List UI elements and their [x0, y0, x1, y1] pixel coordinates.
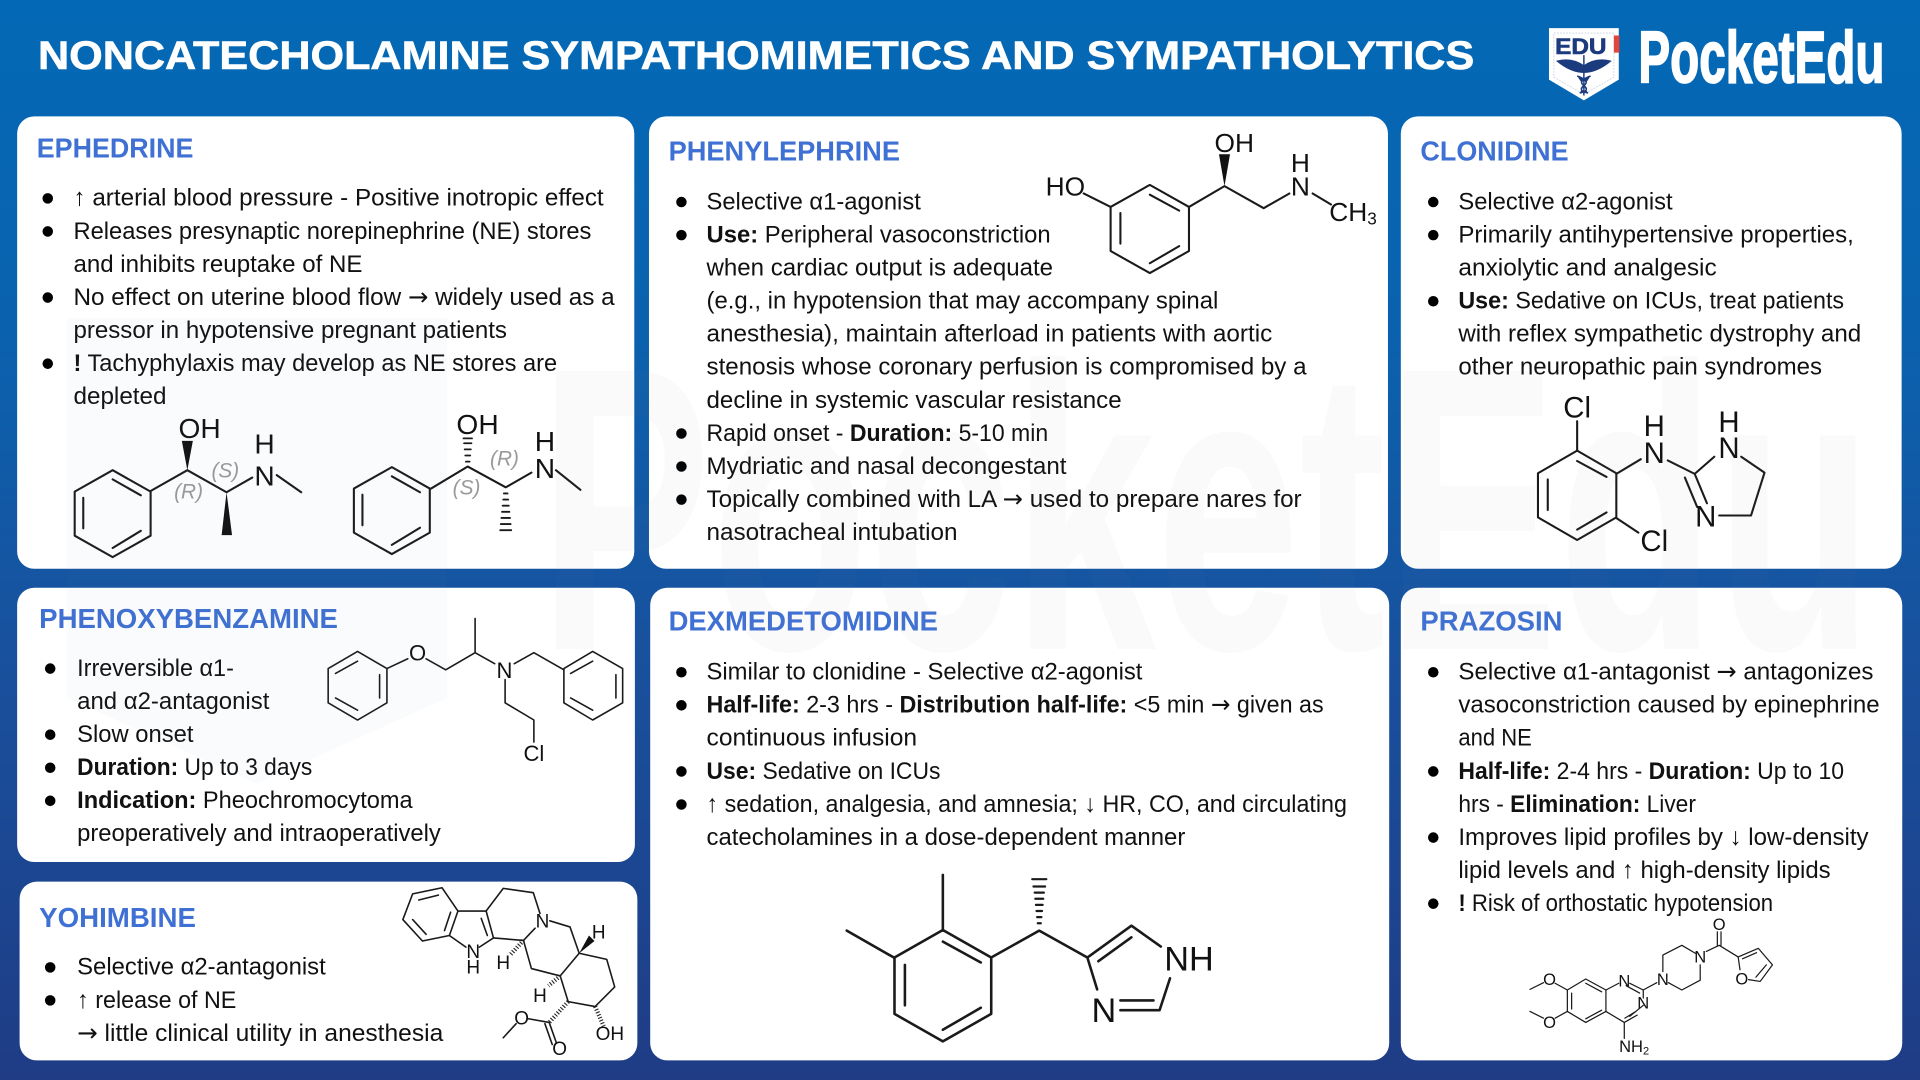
bullet list: phenylephrine: when cardiac output is adequate	[706, 255, 1053, 282]
bullet list: phenylephrine: decline in systemic vascular resistance	[707, 387, 1122, 414]
molecule: yohimbine: H	[592, 923, 606, 944]
molecule: clonidine: N	[1695, 501, 1716, 534]
heading: phenoxybenzamine: PHENOXYBENZAMINE	[39, 603, 338, 634]
molecule: phenoxybenzamine: N	[497, 658, 512, 683]
bullet list: phenoxybenzamine: and α2-antagonist	[77, 688, 270, 715]
bullet list: clonidine: Selective α2-agonist	[1458, 188, 1673, 215]
bullet list: yohimbine: Selective α2-antagonist	[77, 954, 326, 981]
molecule: (1S,2R)-ephedrine: (S)	[453, 477, 480, 500]
heading: clonidine: CLONIDINE	[1420, 135, 1569, 166]
bullet list: ephedrine: depleted	[73, 383, 167, 410]
bullet list: clonidine: Use: Sedative on ICUs, treat patients	[1458, 288, 1844, 315]
bullet list: prazosin: hrs - Elimination: Liver	[1458, 791, 1696, 818]
molecule: (1R,2S)-ephedrine: (S)	[211, 460, 239, 483]
molecule: prazosin: 2	[1643, 1045, 1649, 1057]
bullet list: prazosin: Selective α1-antagonist → antagonizes	[1458, 657, 1873, 686]
bullet list: ephedrine	[42, 185, 615, 410]
bullet list: phenoxybenzamine	[45, 655, 442, 847]
bullet list: yohimbine	[45, 954, 444, 1047]
bullet list: clonidine: with reflex sympathetic dystrophy and	[1457, 321, 1861, 348]
bullet list: phenylephrine: Use: Peripheral vasoconstriction	[707, 221, 1051, 248]
bullet list: phenylephrine: Mydriatic and nasal decongestant	[707, 453, 1067, 480]
molecule: clonidine: H	[1718, 406, 1740, 439]
heading: yohimbine: YOHIMBINE	[39, 902, 196, 933]
molecule: clonidine: H	[1644, 410, 1665, 443]
molecule: (1S,2R)-ephedrine: OH	[456, 409, 499, 440]
panel: phenoxybenzamine	[17, 588, 635, 862]
bullet list: phenylephrine: Rapid onset - Duration: 5-10 min	[707, 420, 1048, 447]
molecule: yohimbine: O	[552, 1039, 567, 1060]
molecule: yohimbine: OH	[596, 1024, 624, 1045]
molecule: (1R,2S)-ephedrine: H	[254, 429, 275, 460]
molecule: (1S,2R)-ephedrine: (R)	[490, 447, 519, 470]
logo: PocketEdu: EDU	[1555, 34, 1607, 59]
molecule: yohimbine: N	[536, 912, 549, 933]
molecule: prazosin: O	[1735, 969, 1748, 988]
bullet list: prazosin: and NE	[1458, 725, 1532, 752]
molecule: prazosin	[1530, 915, 1772, 1057]
bullet list: phenylephrine: stenosis whose coronary perfusion is compromised by a	[707, 354, 1307, 381]
molecule: (1R,2S)-ephedrine: N	[254, 461, 275, 492]
molecule: phenylephrine: CH	[1329, 197, 1367, 227]
molecule: phenylephrine: N	[1291, 171, 1310, 201]
bullet list: ephedrine: ! Tachyphylaxis may develop as NE stores are	[73, 350, 557, 377]
heading: ephedrine: EPHEDRINE	[37, 132, 193, 163]
molecule: yohimbine: H	[496, 953, 510, 974]
molecule: phenylephrine: HO	[1046, 171, 1085, 201]
heading: prazosin: PRAZOSIN	[1420, 606, 1562, 637]
bullet list: yohimbine: ↑ release of NE	[77, 987, 236, 1014]
molecule: phenoxybenzamine	[328, 618, 623, 766]
panel: prazosin	[1401, 588, 1902, 1060]
bullet list: ephedrine: Releases presynaptic norepinephrine (NE) stores	[73, 218, 591, 245]
bullet list: phenylephrine: (e.g., in hypotension that may accompany spinal	[707, 288, 1218, 315]
panel: dexmedetomidine	[650, 588, 1389, 1060]
molecule: prazosin: N	[1618, 971, 1630, 990]
panel: phenylephrine	[649, 116, 1388, 569]
molecule: (1R,2S)-ephedrine	[75, 413, 301, 557]
molecule: clonidine: Cl	[1640, 525, 1668, 558]
molecule: yohimbine	[403, 888, 624, 1060]
bullet list: dexmedetomidine	[676, 659, 1347, 851]
molecule: yohimbine: H	[533, 986, 547, 1007]
molecule: phenoxybenzamine: Cl	[523, 741, 544, 766]
molecule: yohimbine: H	[466, 957, 480, 978]
bullet list: phenylephrine: anesthesia), maintain afterload in patients with aortic	[707, 321, 1272, 348]
molecule: yohimbine: N	[466, 942, 480, 963]
bullet list: dexmedetomidine: Half-life: 2-3 hrs - Distribution half-life: <5 min → given as	[707, 690, 1324, 719]
heading: phenylephrine: PHENYLEPHRINE	[669, 135, 900, 166]
bullet list: prazosin: ! Risk of orthostatic hypotension	[1458, 890, 1773, 917]
bullet list: clonidine: anxiolytic and analgesic	[1458, 255, 1717, 282]
bullet list: ephedrine: and inhibits reuptake of NE	[73, 251, 362, 278]
molecule: phenylephrine: H	[1291, 148, 1310, 178]
watermark: PocketEdu logo	[67, 283, 1873, 784]
molecule: (1R,2S)-ephedrine: (R)	[174, 480, 203, 503]
bullet list: clonidine: Primarily antihypertensive properties,	[1458, 221, 1854, 248]
bullet list: ephedrine: pressor in hypotensive pregnant patients	[73, 317, 507, 344]
bullet list: ephedrine: No effect on uterine blood flow → widely used as a	[73, 282, 615, 311]
molecule: (1R,2S)-ephedrine: OH	[178, 413, 221, 444]
bullet list: prazosin	[1428, 657, 1880, 917]
molecule: dexmedetomidine	[847, 875, 1214, 1041]
bullet list: prazosin: lipid levels and ↑ high-density lipids	[1458, 857, 1831, 884]
molecule: clonidine: Cl	[1563, 392, 1591, 425]
bullet list: clonidine	[1428, 188, 1861, 381]
panel: clonidine	[1401, 116, 1902, 569]
bullet list: phenoxybenzamine: Indication: Pheochromocytoma	[77, 787, 413, 814]
molecule: clonidine: N	[1644, 437, 1665, 470]
molecule: prazosin: NH	[1619, 1037, 1643, 1056]
molecule: prazosin: O	[1543, 1013, 1556, 1032]
molecule: prazosin: N	[1694, 947, 1706, 966]
molecule: dexmedetomidine: N	[1092, 992, 1116, 1030]
bullet list: yohimbine: → little clinical utility in anesthesia	[77, 1018, 444, 1047]
molecule: phenylephrine: 3	[1367, 209, 1377, 229]
bullet list: phenylephrine: nasotracheal intubation	[707, 519, 958, 546]
bullet list: ephedrine: ↑ arterial blood pressure - Positive inotropic effect	[73, 185, 604, 212]
bullet list: dexmedetomidine: Use: Sedative on ICUs	[707, 758, 940, 785]
molecule: prazosin: N	[1657, 970, 1669, 989]
bullet list: phenylephrine	[676, 188, 1307, 546]
bullet list: dexmedetomidine: Similar to clonidine - Selective α2-agonist	[707, 659, 1143, 686]
bullet list: prazosin: Half-life: 2-4 hrs - Duration: Up to 10	[1458, 758, 1844, 785]
bullet list: clonidine: other neuropathic pain syndromes	[1458, 354, 1822, 381]
molecule: clonidine	[1538, 392, 1764, 558]
bullet list: dexmedetomidine: ↑ sedation, analgesia, and amnesia; ↓ HR, CO, and circulating	[707, 791, 1347, 818]
bullet list: phenylephrine: Selective α1-agonist	[707, 188, 921, 215]
bullet list: phenoxybenzamine: preoperatively and intraoperatively	[77, 820, 442, 847]
bullet list: phenoxybenzamine: Irreversible α1-	[77, 655, 234, 682]
molecule: phenylephrine	[1046, 128, 1377, 273]
logo: PocketEdu	[1549, 16, 1884, 100]
molecule: prazosin: O	[1713, 915, 1726, 934]
molecule: dexmedetomidine: NH	[1164, 940, 1214, 978]
molecule: (1S,2R)-ephedrine: N	[535, 453, 555, 484]
bullet list: prazosin: vasoconstriction caused by epinephrine	[1458, 692, 1880, 719]
panel: ephedrine	[17, 116, 634, 569]
molecule: phenoxybenzamine: O	[409, 641, 426, 666]
bullet list: prazosin: Improves lipid profiles by ↓ low-density	[1458, 824, 1869, 851]
molecule: (1S,2R)-ephedrine: H	[535, 426, 555, 457]
bullet list: dexmedetomidine: continuous infusion	[707, 725, 917, 752]
molecule: prazosin: N	[1637, 993, 1649, 1012]
molecule: phenylephrine: OH	[1215, 128, 1254, 158]
molecule: clonidine: N	[1718, 432, 1740, 465]
molecule: yohimbine: O	[514, 1008, 529, 1029]
molecule: (1S,2R)-ephedrine	[354, 409, 580, 554]
bullet list: dexmedetomidine: catecholamines in a dose-dependent manner	[707, 824, 1185, 851]
bullet list: phenoxybenzamine: Slow onset	[77, 721, 194, 748]
molecule: prazosin: O	[1543, 970, 1556, 989]
header title: NONCATECHOLAMINE SYMPATHOMIMETICS AND SYMPATHOLYTICS	[38, 34, 1474, 78]
bullet list: phenylephrine: Topically combined with LA → used to prepare nares for	[707, 484, 1302, 513]
heading: dexmedetomidine: DEXMEDETOMIDINE	[669, 606, 938, 637]
bullet list: phenoxybenzamine: Duration: Up to 3 days	[77, 754, 312, 781]
panel: yohimbine	[20, 882, 637, 1060]
